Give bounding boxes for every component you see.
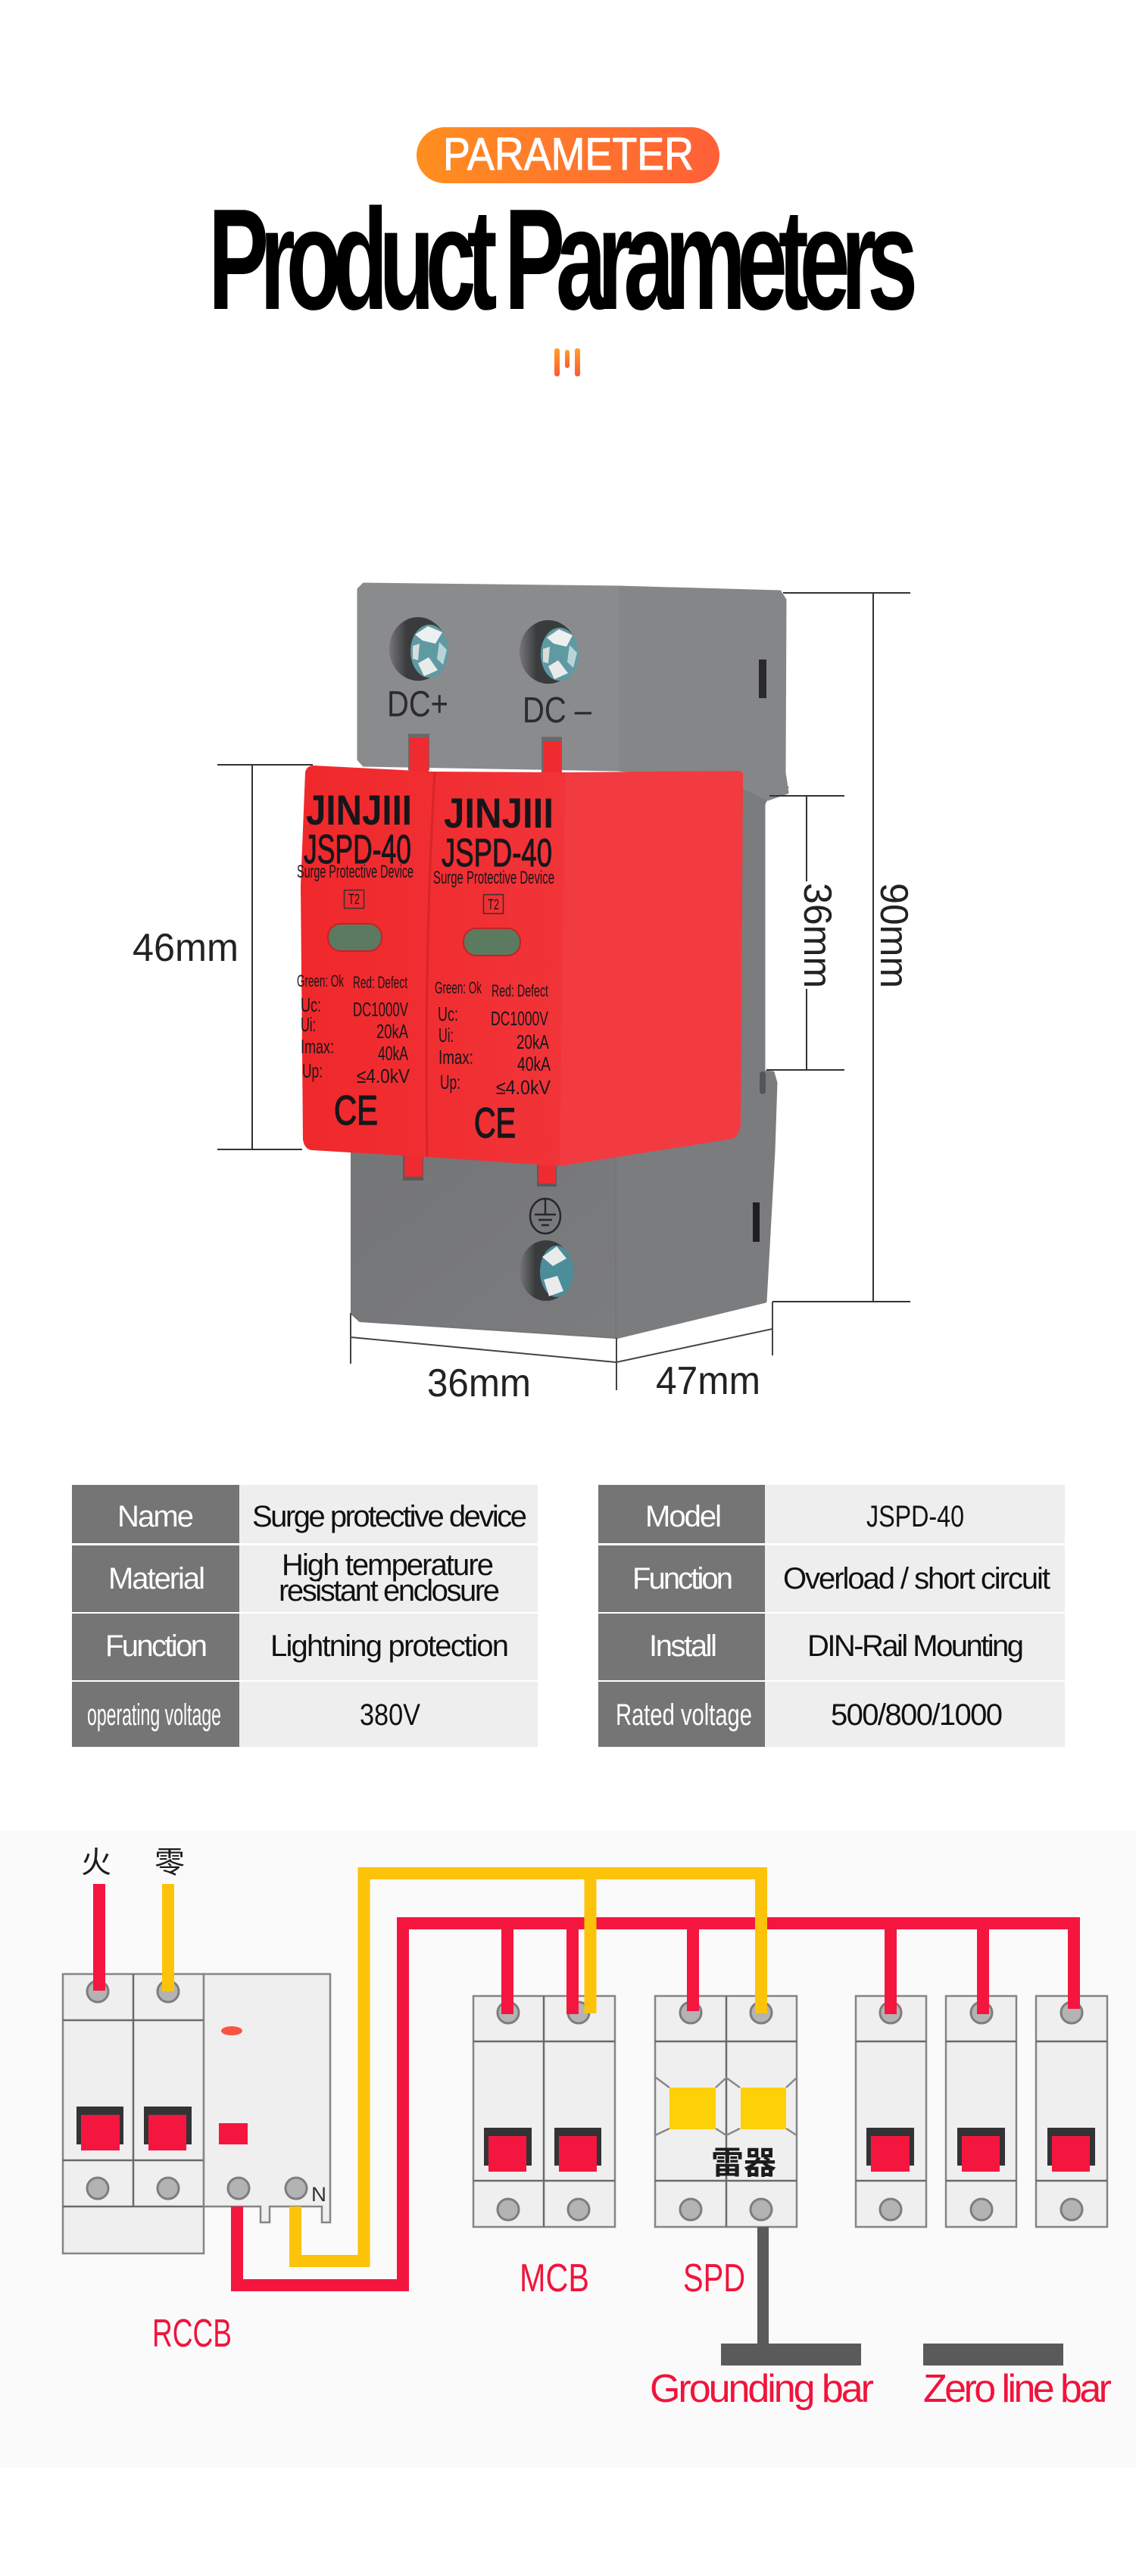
label: left module print: 40kA [378,1042,408,1065]
label: right module print: ≤4.0kV [496,1076,551,1099]
terminal labels [387,685,591,731]
label: left module print [297,786,414,1134]
row: Model [598,1485,1065,1543]
row: Material: resistant enclosure [279,1574,500,1608]
row: Material [72,1545,538,1612]
screw: DC- terminal [520,620,579,684]
label: left module print: Imax: [301,1035,334,1058]
RCCB 2-pole module [63,1974,204,2253]
red tabs and slots [403,734,562,1187]
row: Rated voltage: Rated voltage [616,1698,752,1732]
row: operating voltage [72,1682,538,1747]
label: left module print: Uc: [301,993,321,1016]
label: right module print: JSPD-40 [442,831,552,875]
neutral wires (yellow) [168,1873,761,2261]
row: Model: Model [645,1500,722,1533]
row: operating voltage: operating voltage [87,1698,221,1732]
label: RCCB: RCCB [152,2312,232,2356]
lower grey block [351,1071,766,1338]
row: Model: JSPD-40 [866,1500,964,1533]
row: Function: Overload / short circuit [783,1562,1050,1595]
label: Zero line bar: Zero line bar [923,2367,1112,2411]
row: Install: Install [649,1629,717,1663]
RCCB leakage module: N [311,2183,326,2206]
dimension: 90mm height [772,593,916,1302]
row: Install: DIN-Rail Mounting [807,1629,1024,1663]
rail and lower block side [606,780,788,1338]
dimension: 36mm rail [766,796,844,1070]
label: right module print [433,789,554,1146]
title: Product Parameters [208,179,914,340]
label: left module print: T2 [348,892,360,908]
terminal labels: DC – [523,691,591,731]
label: right module print: Red: Defect [492,981,548,1000]
panel: left specification table [72,1485,538,1747]
label: SPD: SPD [683,2256,745,2300]
row: Rated voltage: 500/800/1000 [831,1698,1003,1732]
label: right module print: Up: [440,1071,460,1093]
row: Function: Function [105,1629,208,1663]
SPD label in Chinese: 雷器 [711,2145,776,2181]
top grey block [358,584,788,800]
screw: DC+ terminal [389,617,448,681]
label: right module print: DC1000V [491,1007,548,1030]
live wires (red) [99,1884,1074,2285]
zero line bar [923,2344,1063,2365]
label: right module print: Ui: [438,1024,454,1046]
label: left module print: Surge Protective Device [297,862,414,882]
label: left module print: JSPD-40 [304,827,411,872]
label: left module print: Up: [302,1059,323,1082]
label: left module print: JINJIII [306,786,412,834]
label: left module print: Ui: [301,1013,316,1036]
dimension: 36mm rail: 36mm [795,883,839,988]
grounding bar [721,2227,861,2365]
label: Grounding bar: Grounding bar [650,2367,874,2411]
panel: wiring diagram background [0,1831,1136,2468]
label: right module print: Imax: [438,1046,473,1068]
label: right module print: JINJIII [444,789,554,837]
dimension: 90mm height: 90mm [872,883,916,988]
row: Name [72,1485,538,1543]
red module housing [301,766,743,1166]
terminal screws [87,1981,1082,2220]
terminal labels: DC+ [387,685,448,725]
row: Name: Surge protective device [252,1500,527,1533]
label: right module print: Green: Ok [435,978,482,997]
label: left module print: CE [334,1087,378,1134]
row: Name: Name [117,1500,194,1533]
single MCB modules [856,1996,1107,2227]
panel: right specification table [598,1485,1065,1747]
row: Rated voltage [598,1682,1065,1747]
labels: live and neutral [81,1846,185,1879]
label: right module print: T2 [488,897,499,913]
label: right module print: CE [474,1099,516,1146]
row: Function [598,1545,1065,1612]
labels: live and neutral: 火 [81,1846,111,1879]
dimension: 36mm width [351,1313,616,1405]
row: Install [598,1614,1065,1680]
wiring diagram [63,1846,1112,2411]
breaker handles [76,2107,1095,2172]
label: right module print: Uc: [438,1003,458,1025]
row: Function [72,1614,538,1680]
dimension: 46mm height: 46mm [133,926,239,970]
MCB double module [473,1996,615,2227]
labels: live and neutral: 零 [154,1846,185,1879]
label: right module print: 20kA [517,1031,549,1053]
label: left module print: Red: Defect [353,973,407,992]
dimension: 36mm width: 36mm [427,1361,531,1405]
label: left module print: 20kA [376,1020,408,1043]
row: Material: Material [108,1562,205,1595]
label: left module print: ≤4.0kV [357,1065,410,1087]
label: right module print: 40kA [517,1053,551,1075]
screw: ground terminal [520,1240,573,1301]
RCCB leakage module [204,1974,330,2222]
label: left module print: Green: Ok [297,971,345,990]
row: Material: High temperature [282,1548,494,1582]
product photo: surge protective device [297,584,788,1338]
row: Function: Lightning protection [270,1629,509,1663]
badge: PARAMETER pill: PARAMETER [443,129,694,179]
dimension: 46mm height [133,765,313,1149]
icon: three orange bars [554,348,580,376]
dimension: 47mm depth [616,1302,772,1403]
icon: ground symbol [530,1199,560,1233]
row: Function: Function [632,1562,733,1595]
row: operating voltage: 380V [360,1698,420,1732]
SPD double module [655,1996,797,2227]
label: left module print: DC1000V [353,998,408,1021]
dimension: 47mm depth: 47mm [656,1359,760,1403]
label: MCB: MCB [520,2256,589,2300]
label: right module print: Surge Protective Device [433,868,554,888]
